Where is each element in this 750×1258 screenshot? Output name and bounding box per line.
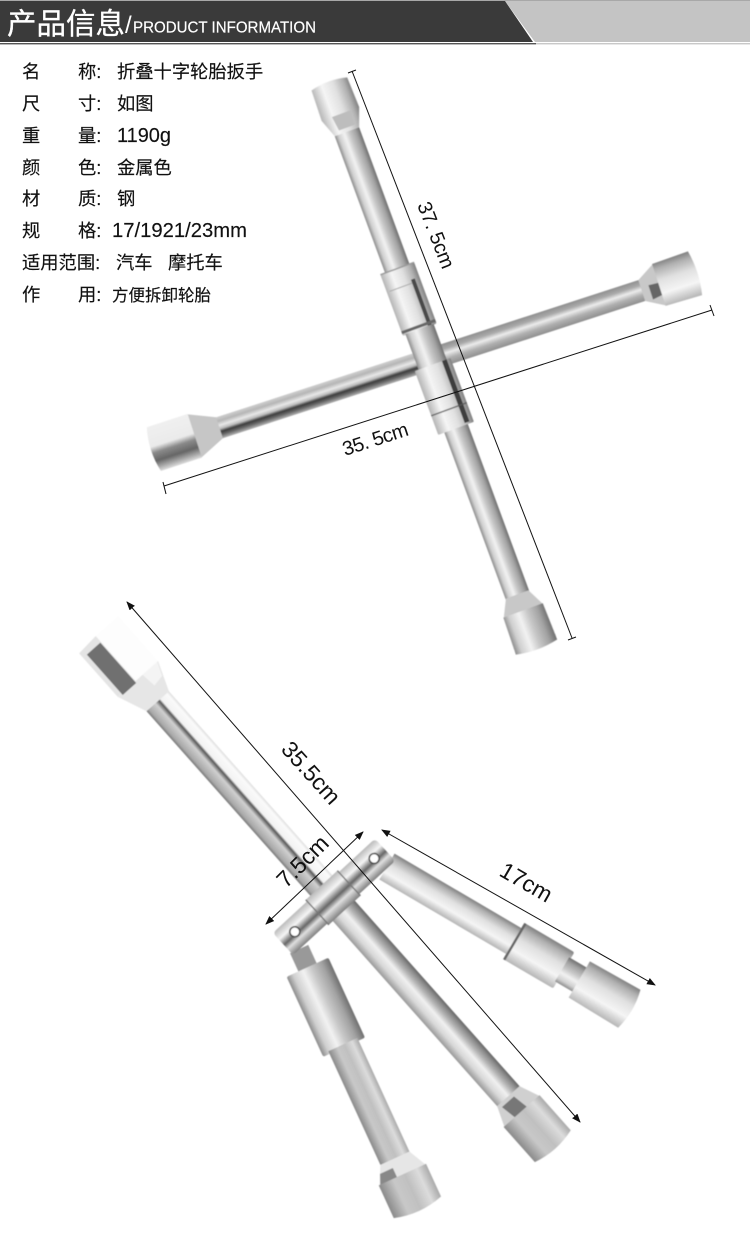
spec: name: 名 <box>22 61 40 82</box>
spec: specification: 规 <box>22 220 40 241</box>
spec: colour: 色: <box>78 157 101 178</box>
spec: weight: 量: <box>78 125 101 146</box>
spec: size: 如图 <box>117 93 154 114</box>
arrow 7.5cm <box>266 832 363 924</box>
title slash: / <box>125 12 132 39</box>
dimension label 35.5cm: 35. 5cm <box>340 419 411 461</box>
spec: name: 称: <box>78 61 101 82</box>
folding hinge bar <box>271 837 397 956</box>
header grey band <box>505 1 750 42</box>
spec: material: 材 <box>22 188 40 209</box>
dimension line 37.5cm <box>348 70 576 640</box>
header dark band <box>0 1 533 42</box>
spec: material: 质: <box>78 188 101 209</box>
spec: purpose: 作 <box>22 284 40 305</box>
spec: specification: 17/1921/23mm <box>112 220 247 242</box>
spec: weight: 重 <box>22 125 40 146</box>
label 7.5cm: 7.5cm <box>271 830 334 893</box>
product specification list <box>22 61 263 305</box>
cross wrench photo <box>144 74 704 657</box>
label 35.5cm: 35.5cm <box>276 736 346 809</box>
spec: purpose: 用: <box>78 284 101 305</box>
subtitle: PRODUCT INFORMATION <box>133 20 316 36</box>
spec: applicable: 适用范围: <box>22 252 100 273</box>
spec: applicable: 摩托车 <box>168 252 223 273</box>
vertical arm <box>308 74 558 657</box>
title: 产品信息 <box>7 8 125 41</box>
spec: material: 钢 <box>117 188 135 209</box>
horizontal arm <box>144 251 704 472</box>
spec: applicable: 汽车 <box>116 252 153 273</box>
dimension line 35.5cm <box>163 305 714 494</box>
spec: colour: 颜 <box>22 157 40 178</box>
arrow 17cm <box>382 830 655 985</box>
spec: name: 折叠十字轮胎扳手 <box>117 61 263 82</box>
spec: size: 寸: <box>78 93 101 114</box>
spec: specification: 格: <box>78 220 101 241</box>
long arm <box>78 616 575 1167</box>
spec: purpose: 方便拆卸轮胎 <box>112 286 211 305</box>
header banner <box>0 0 750 44</box>
lower folded arm <box>276 938 443 1222</box>
spec: size: 尺 <box>22 93 40 114</box>
spec: colour: 金属色 <box>117 157 172 178</box>
arrow 35.5cm <box>127 602 580 1122</box>
spec: weight: 1190g <box>117 125 171 147</box>
folded wrench photo <box>78 616 643 1222</box>
hinge pin holes <box>288 925 302 939</box>
label 17cm: 17cm <box>496 857 557 907</box>
right folded arm <box>376 848 643 1029</box>
dimension label 37.5cm: 37. 5cm <box>412 199 458 272</box>
